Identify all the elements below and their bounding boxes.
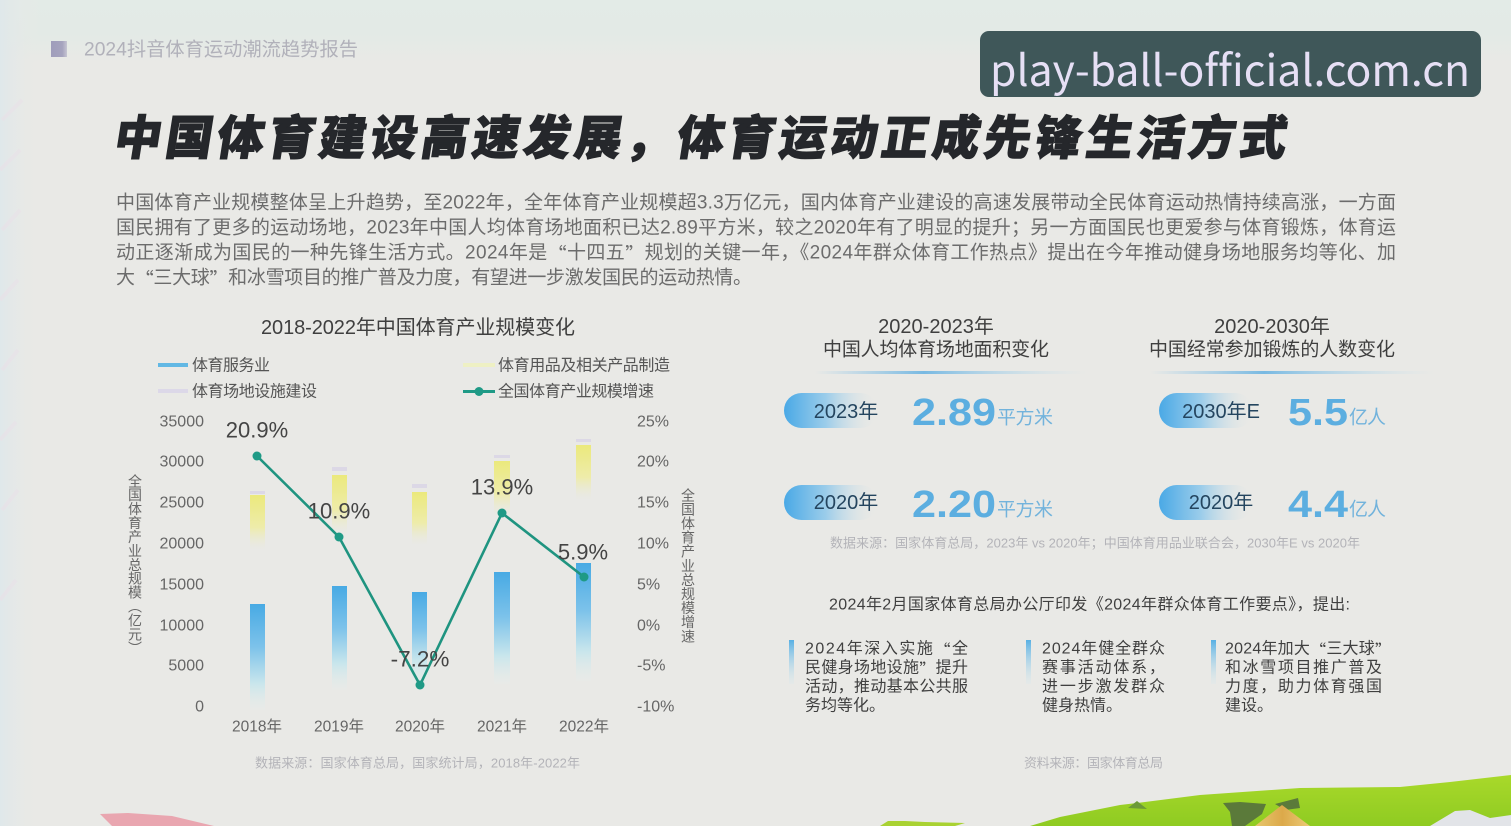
stat 2023: 2.89 [912, 392, 996, 434]
policy item 2 [1026, 640, 1165, 714]
stat 2030E: 2030年E [1182, 400, 1260, 423]
stat 2020 [1159, 484, 1386, 526]
left axis [160, 414, 204, 716]
intro paragraph: 动正逐渐成为国民的一种先锋生活方式。2024年是“十四五”规划的关键一年，《2024年群众体育工作热点》提出在今年推动健身场地服务均等化、加 [116, 240, 1396, 266]
growth line [252, 452, 588, 690]
growth labels: 5.9% [558, 540, 608, 564]
policy item 3 [1211, 637, 1391, 714]
intro paragraph [116, 192, 1396, 292]
stat 2020: 2.20 [912, 484, 996, 526]
intro paragraph: 大“三大球”和冰雪项目的推广普及力度，有望进一步激发国民的运动热情。 [116, 264, 752, 292]
right axis: 10% [637, 536, 669, 552]
left axis: 30000 [160, 454, 204, 470]
left axis: 35000 [160, 414, 204, 430]
chart source: 数据来源：国家体育总局，国家统计局，2018年-2022年 [255, 756, 580, 770]
header tag: 2024抖音体育运动潮流趋势报告 [84, 38, 358, 60]
left axis: 15000 [160, 576, 204, 594]
chart legend: 全国体育产业规模增速 [498, 382, 654, 400]
left axis title: 全国体育产业总规模（亿元） [127, 473, 143, 655]
left axis: 10000 [160, 618, 204, 634]
growth labels: 10.9% [308, 498, 370, 524]
stat 2020: 2020年 [1189, 491, 1253, 514]
stat 2020: 亿人 [1349, 498, 1386, 520]
right axis: 25% [637, 414, 669, 430]
watermark badge: play-ball-official.com.cn [990, 37, 1470, 99]
stat 2023: 平方米 [997, 406, 1053, 428]
policy item 3: 建设。 [1225, 696, 1273, 714]
heading: 2020-2023年 [878, 315, 994, 338]
right axis: 15% [637, 494, 669, 512]
stat 2020 [784, 484, 1053, 526]
policy item 1: 民健身场地设施”提升 [805, 656, 968, 680]
stat 2020: 4.4 [1288, 484, 1348, 526]
x axis labels: 2018年 [232, 718, 282, 736]
policy item 1: 活动，推动基本公共服 [805, 678, 968, 696]
stacked bars [250, 439, 591, 710]
policy item 2: 赛事活动体系， [1042, 658, 1165, 676]
decoration: green hill with tent [880, 775, 1511, 826]
panel: industry scale chart [127, 316, 696, 770]
right axis: 5% [637, 576, 660, 594]
left axis: 0 [195, 698, 204, 716]
policy item 2: 2024年健全群众 [1042, 640, 1165, 658]
stat 2030E: 亿人 [1349, 406, 1386, 428]
heading [1149, 315, 1395, 360]
right axis title: 全国体育产业总规模增速 [680, 487, 696, 644]
policy item 3: 力度，助力体育强国 [1225, 678, 1382, 696]
policy source: 资料来源：国家体育总局 [1024, 756, 1163, 770]
intro paragraph: 中国体育产业规模整体呈上升趋势，至2022年，全年体育产业规模超3.3万亿元，国内体育产业建设的高速发展带动全民体育运动热情持续高涨，一方面 [116, 192, 1396, 214]
right axis: -5% [637, 658, 665, 674]
x axis labels: 2019年 [314, 718, 364, 736]
stat 2020: 平方米 [997, 498, 1053, 520]
x axis labels: 2021年 [477, 718, 527, 736]
policy item 1 [789, 637, 968, 714]
intro paragraph: 国民拥有了更多的运动场地，2023年中国人均体育场地面积已达2.89平方米，较之2020年有了明显的提升；另一方面国民也更爱参与体育锻炼，体育运 [116, 216, 1396, 238]
policy item 3: 和冰雪项目推广普及 [1225, 658, 1382, 676]
x axis labels [232, 718, 609, 736]
right axis: 20% [637, 454, 669, 470]
growth labels: 20.9% [226, 418, 288, 442]
panel: regular exercisers [1149, 315, 1435, 526]
heading: 中国人均体育场地面积变化 [823, 338, 1049, 360]
stat 2030E: 5.5 [1288, 392, 1348, 434]
stat 2030E [1159, 392, 1386, 434]
policy item 1: 2024年深入实施“全 [805, 637, 968, 661]
chart title: 2018-2022年中国体育产业规模变化 [261, 316, 575, 339]
x axis labels: 2020年 [395, 718, 445, 736]
right axis [637, 414, 674, 716]
x axis labels: 2022年 [559, 718, 609, 736]
policy item 3: 2024年加大“三大球” [1225, 637, 1391, 661]
growth labels: 13.9% [471, 474, 533, 500]
decoration: pink shape [100, 813, 214, 826]
left axis: 5000 [168, 658, 204, 674]
chart legend: 体育用品及相关产品制造 [498, 356, 670, 374]
growth labels [226, 418, 608, 672]
stats source: 数据来源：国家体育总局，2023年 vs 2020年；中国体育用品业联合会，2030年E vs 2020年 [830, 536, 1360, 552]
growth labels: -7.2% [391, 646, 449, 672]
policy item 2: 健身热情。 [1042, 696, 1122, 714]
chart legend: 体育服务业 [192, 356, 270, 374]
heading: 2020-2030年 [1214, 315, 1330, 338]
left axis: 25000 [160, 494, 204, 512]
right axis: 0% [637, 618, 660, 634]
heading: 中国经常参加锻炼的人数变化 [1149, 338, 1395, 360]
left axis: 20000 [160, 536, 204, 552]
policy item 2: 进一步激发群众 [1042, 678, 1165, 696]
policy intro: 2024年2月国家体育总局办公厅印发《2024年群众体育工作要点》，提出: [829, 596, 1350, 614]
panel: per-capita sports area [784, 315, 1087, 526]
stat 2023: 2023年 [814, 400, 878, 423]
policy item 1: 务均等化。 [805, 696, 885, 714]
heading [823, 315, 1049, 360]
chart legend [158, 356, 670, 400]
stat 2020: 2020年 [814, 491, 878, 514]
main title: 中国体育建设高速发展，体育运动正成先锋生活方式 [110, 100, 1293, 168]
right axis: -10% [637, 698, 674, 716]
chart legend: 体育场地设施建设 [192, 382, 317, 400]
stat 2023 [784, 392, 1053, 434]
